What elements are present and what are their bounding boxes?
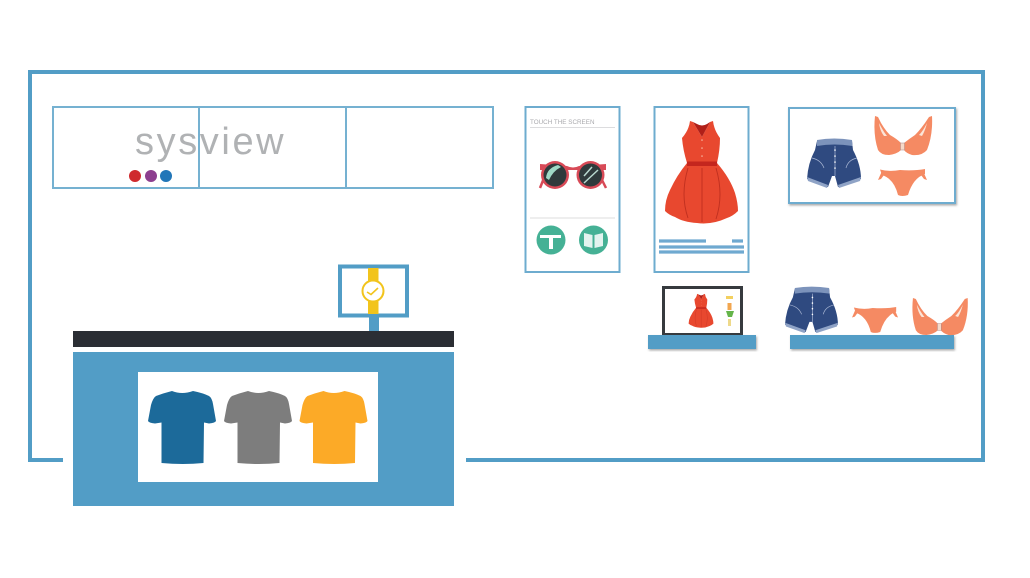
icon: green book button	[579, 226, 608, 254]
store outer frame	[30, 72, 983, 460]
icon: watch	[362, 268, 384, 314]
product text lines	[659, 241, 744, 252]
panel: counter with t-shirts	[73, 352, 454, 506]
icon: blue t-shirt	[148, 391, 216, 464]
wall display outline	[53, 107, 493, 188]
left shelf	[648, 335, 756, 349]
icon: sunglasses	[540, 161, 606, 189]
dress illustration	[665, 121, 738, 223]
icon: denim shorts	[807, 138, 861, 188]
kiosk heading: TOUCH THE SCREEN	[530, 119, 595, 126]
panel: wall display with logo	[53, 107, 493, 188]
shelf items: shorts and bikini	[785, 287, 968, 335]
icon: orange t-shirt	[300, 391, 368, 464]
tablet dress	[689, 294, 713, 328]
icon: grey t-shirt	[224, 391, 292, 464]
icon: shelf shorts	[785, 287, 838, 333]
icon: bikini bottom	[878, 169, 927, 196]
logo dots	[129, 170, 172, 182]
icon: shelf bikini top	[912, 298, 968, 335]
icon: shelf bikini bottom	[852, 307, 898, 333]
panel: swimwear display	[789, 108, 955, 203]
tablet thumbnails	[726, 296, 734, 326]
logo text: sysview	[135, 121, 286, 163]
watch display stand	[340, 266, 407, 332]
right shelf	[790, 335, 954, 349]
panel: touch screen kiosk	[526, 107, 620, 272]
panel: dress display	[654, 107, 748, 272]
icon: green tool button	[536, 226, 566, 254]
counter top	[73, 331, 454, 347]
icon: bikini top	[874, 116, 932, 155]
tablet on shelf	[664, 288, 742, 334]
